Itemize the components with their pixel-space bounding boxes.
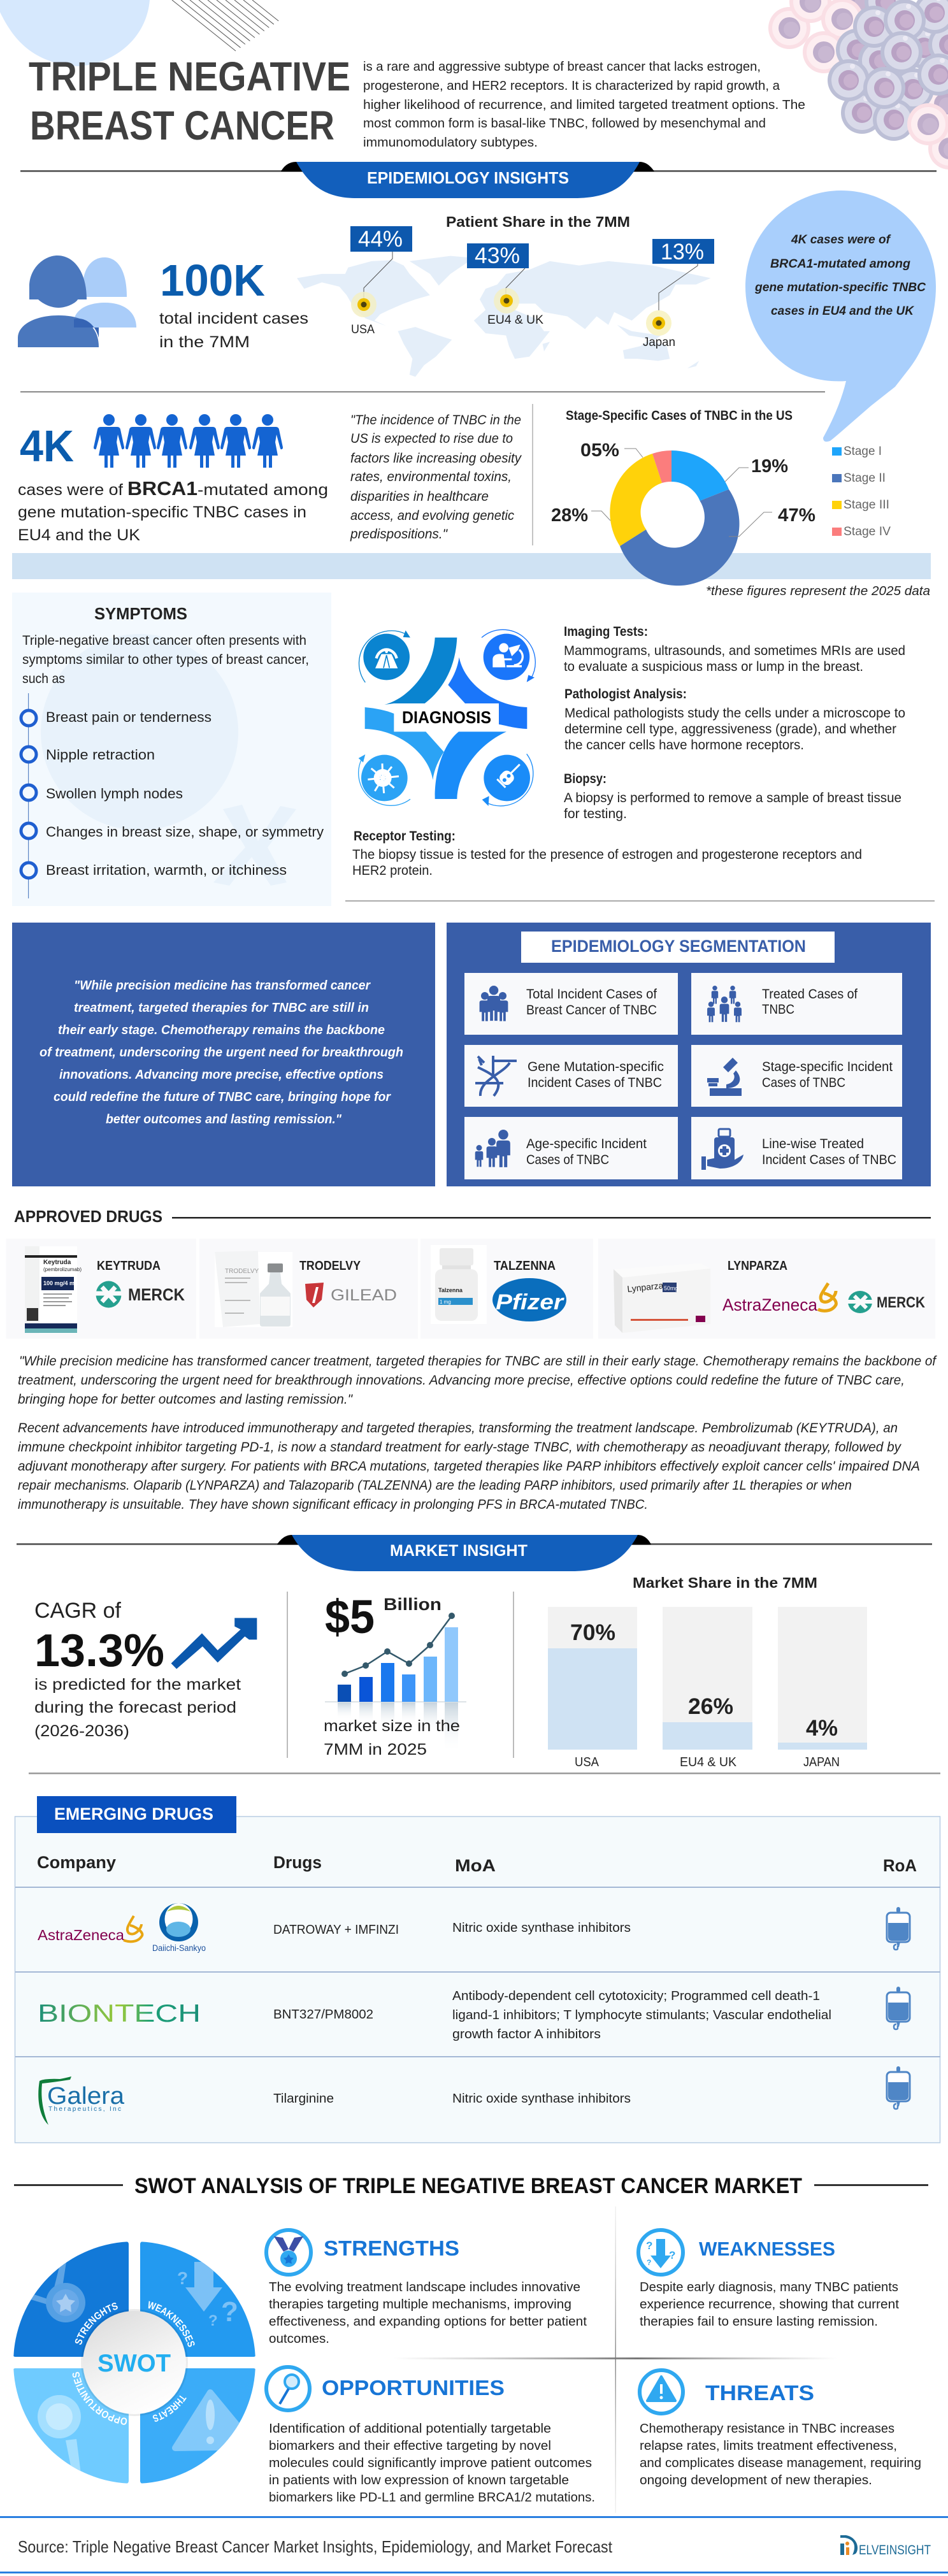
icon: rising arrow [171,1618,257,1669]
diagram: SWOT wheel: OPPORTUNITIES [73,2371,127,2425]
row: Galera: Therapeutics, Inc [48,2106,121,2113]
block: weaknesses: experience recurrence, showing that current [640,2298,899,2312]
callout bubble [745,191,936,442]
panel: epidemiology segmentation [447,923,931,1186]
callout bubble: 4K cases were of [791,233,891,247]
stat: 100K incident cases: 100K [160,255,265,305]
stat: CAGR: (2026-2036) [34,1722,129,1740]
row: AstraZeneca Daiichi-Sankyo: Nitric oxide synthase inhibitors [452,1921,631,1935]
block: threats: relapse rates, limits treatment effectiveness, [640,2439,897,2453]
chart: market share: 4% [806,1716,838,1741]
stat: 100K incident cases: total incident cases [159,310,308,327]
text: imaging tests: Mammograms, ultrasounds, and sometimes MRIs are used [564,644,905,658]
panel: symptoms: symptoms similar to other types of breast cancer, [22,652,309,667]
data note: *these figures represent the 2025 data [706,584,930,598]
card: line-wise treated: Incident Cases of TNBC [762,1153,896,1167]
stat: market size: market size in the [324,1717,460,1735]
quote text: "While precision medicine has transformed cancer treatment, targeted therapies for TNBC are still in their early stage. Chemotherapy remains the backbone of [19,1354,937,1369]
panel: quote: better outcomes and lasting remission." [106,1112,341,1126]
quote: incidence: rates, environmental toxins, [350,470,512,484]
panel: symptoms: Triple-negative breast cancer often presents with [22,633,306,648]
product box: Lynparza [627,1280,664,1294]
drug card: Trodelvy: TRODELVY [299,1259,361,1273]
card: total incident cases: Breast Cancer of TNBC [526,1003,657,1018]
quote text [18,1354,937,1407]
text: receptor testing: HER2 protein. [352,863,433,878]
logo: Merck [96,1281,185,1307]
diagram: SWOT wheel: THREATS [153,2396,187,2422]
stat: CAGR: 13.3% [34,1625,164,1676]
row: Galera: Galera [47,2083,125,2110]
text: pathologist analysis: the cancer cells have hormone receptors. [564,738,804,752]
quote: incidence: "The incidence of TNBC in the [350,413,521,428]
map marker: Japan: Japan [643,336,675,349]
text: biopsy [564,772,901,821]
card: age-specific [464,1117,678,1179]
table header: RoA [883,1856,917,1875]
row: BioNTech: BNT327/PM8002 [273,2008,373,2022]
card: total incident cases [464,973,678,1035]
treatment landscape text: Recent advancements have introduced immunotherapy and targeted therapies, transforming the treatment landscape. Pembrolizumab (KEYTRUDA), an [18,1421,898,1436]
logo: Pfizer [492,1278,566,1321]
panel: symptoms: Nipple retraction [46,747,155,763]
panel: symptoms: such as [22,672,65,686]
product [431,1245,487,1324]
text: biopsy: for testing. [564,807,627,821]
icon: syringe [496,760,524,789]
chart: stage-specific donut: 05% [580,440,619,461]
chart: stage-specific donut [551,408,891,586]
block: weaknesses: Despite early diagnosis, many TNBC patients [640,2280,898,2294]
diagram: SWOT wheel: ? [221,2296,238,2328]
intro text: is a rare and aggressive subtype of breast cancer that lacks estrogen, [363,60,761,74]
drug card: Lynparza [598,1239,935,1339]
text block: -mutated among [198,481,328,499]
panel: quote: could redefine the future of TNBC care, bringing hope for [54,1090,391,1104]
chart: stage-specific donut: Stage-Specific Cases of TNBC in the US [566,408,793,423]
card: gene mutation: Gene Mutation-specific [528,1060,664,1074]
panel: symptoms: Breast irritation, warmth, or itchiness [46,862,287,878]
legend: Stage II [844,471,886,485]
block: threats: ongoing development of new therapies. [640,2473,872,2487]
row: AstraZeneca Daiichi-Sankyo: Daiichi-Sankyo [152,1943,206,1953]
block: threats [640,2370,921,2487]
chart: market share: Market Share in the 7MM [633,1574,817,1591]
icon: six women [94,414,283,468]
text: pathologist analysis: Pathologist Analysis: [564,687,687,702]
row: BioNTech: Antibody-dependent cell cytotoxicity; Programmed cell death-1 [452,1989,820,2003]
drug card: Talzenna: TALZENNA [494,1259,556,1273]
callout bubble: gene mutation-specific TNBC [754,281,926,294]
footer: Source: Triple Negative Breast Cancer Market Insights, Epidemiology, and Market Forecast [18,2537,613,2556]
drug card: Keytruda: KEYTRUDA [97,1259,161,1273]
chart: patient share world map [297,213,714,377]
product box [25,1246,82,1334]
panel: epidemiology segmentation: EPIDEMIOLOGY SEGMENTATION [551,937,806,956]
value: USA 44%: 44% [358,227,403,252]
card: treated cases: TNBC [762,1002,794,1017]
title: BREAST CANCER [30,103,334,148]
quote text: bringing hope for better outcomes and lasting remission." [18,1392,354,1407]
text: biopsy: A biopsy is performed to remove a sample of breast tissue [564,791,901,805]
row: BioNTech: growth factor A inhibitors [452,2027,601,2041]
panel: emerging drugs table [15,1796,940,2143]
product [215,1251,292,1327]
treatment landscape text: adjuvant monotherapy after surgery. For patients with BRCA mutations, targeted therapies like PARP inhibitors effectively exploit cancer cells' impaired DNA [18,1459,920,1474]
row: AstraZeneca Daiichi-Sankyo: DATROWAY + IMFINZI [273,1923,399,1937]
stat: market size: Billion [384,1595,442,1614]
table header: Drugs [273,1853,322,1872]
map marker: Japan [643,310,675,349]
logo: Merck: MERCK [128,1285,185,1304]
panel: symptoms: Breast pain or tenderness [46,709,212,725]
block: strengths: therapies targeting multiple mechanisms, improving [269,2298,571,2312]
diagram: SWOT wheel: ? [177,2268,188,2288]
diagram: SWOT wheel: SWOT [97,2350,171,2377]
drug card: Keytruda [6,1239,196,1339]
callout bubble: BRCA1-mutated among [770,257,910,271]
illustration: cancer cells [768,0,948,169]
footer [0,2516,948,2573]
quote: incidence [350,413,522,542]
quote: incidence: US is expected to rise due to [350,431,513,446]
product: TRODELVY [225,1268,259,1275]
chart: stage-specific donut: 47% [778,505,815,526]
legend: Stage IV [844,525,891,538]
map marker: USA [351,292,377,336]
card: stage-specific [691,1045,902,1107]
card: gene mutation [464,1045,678,1107]
title [29,54,350,148]
card: stage-specific: Cases of TNBC [762,1076,845,1090]
decorative dividers [615,2206,616,2513]
light band [12,553,931,579]
text: imaging tests: to evaluate a suspicious mass or lump in the breast. [564,659,863,674]
text: receptor testing [352,829,862,878]
logo: AstraZeneca: AstraZeneca [722,1295,818,1314]
chart: market share: USA [575,1755,600,1769]
stat: 4K BRCA1: 4K [20,421,74,471]
card: age-specific: Age-specific Incident [526,1137,647,1151]
drug card: Lynparza: LYNPARZA [728,1259,787,1273]
panel: symptoms: Changes in breast size, shape, or symmetry [46,824,324,840]
logo: DelveInsight [840,2535,931,2558]
stat: market size: $5 [325,1590,375,1643]
stat: market size: 7MM in 2025 [324,1741,427,1759]
diagram: diagnosis [359,630,535,806]
intro text: progesterone, and HER2 receptors. It is characterized by rapid growth, a [363,79,780,93]
value: EU4 & UK 43%: 43% [475,243,520,268]
block: opportunities: OPPORTUNITIES [322,2376,505,2400]
treatment landscape text: immunotherapy is unsuitable. They have shown significant efficacy in prolonging PFS in BRCA-mutated TNBC. [18,1497,648,1512]
drug card: Talzenna [420,1239,593,1339]
icon: MRI [375,649,398,668]
block: threats: and complicates disease management, requiring [640,2456,921,2470]
logo: Pfizer: Pfizer [496,1290,564,1314]
product box [614,1263,710,1333]
section banner: epidemiology insights [20,162,937,198]
title: TRIPLE NEGATIVE [29,54,350,99]
block: strengths: effectiveness, and expanding options for better patient [269,2315,587,2329]
panel: quote: their early stage. Chemotherapy remains the backbone [58,1023,385,1037]
diagram: SWOT wheel: ? [208,2312,218,2329]
product: Talzenna [438,1287,463,1293]
panel: emerging drugs table: EMERGING DRUGS [54,1804,213,1824]
panel: quote: treatment, targeted therapies for TNBC are still in [74,1001,369,1015]
logo: AstraZeneca [722,1283,836,1314]
chart: market share: EU4 & UK [680,1755,737,1769]
row: BioNTech [38,1987,910,2041]
chart: stage-specific donut: 28% [551,505,588,526]
card: treated cases [691,973,902,1035]
text block: cases were of [18,481,123,499]
quote: incidence: factors like increasing obesity [350,451,522,466]
diagram: SWOT wheel: STRENGHTS [75,2303,118,2345]
row: BioNTech: ligand-1 inhibitors; T lymphocyte stimulants; Vascular endothelial [452,2008,831,2022]
chart: market share: 70% [570,1620,615,1645]
decorative blob top left [0,0,150,66]
chart: market share: JAPAN [803,1755,840,1769]
logo: Merck: MERCK [877,1294,926,1311]
text: imaging tests [564,624,905,674]
card: gene mutation: Incident Cases of TNBC [528,1076,662,1090]
row: AstraZeneca Daiichi-Sankyo [38,1903,910,1953]
text block: BRCA1 [127,477,198,500]
drug card: Trodelvy [199,1239,418,1339]
logo: Merck [848,1291,926,1313]
block: opportunities: biomarkers like PD-L1 and germline BRCA1/2 mutations. [269,2491,595,2505]
block: strengths [266,2230,587,2346]
row: BioNTech: BIONTECH [38,2000,201,2027]
quote: incidence: disparities in healthcare [350,489,489,504]
intro text [363,60,805,150]
icon: pathologist [492,643,522,667]
stat: market size [324,1590,466,1759]
map marker: EU4 & UK: EU4 & UK [487,313,543,327]
block: opportunities: in patients with low expression of known targetable [269,2473,569,2487]
icon: people [18,255,136,347]
callout bubble: cases in EU4 and the UK [771,305,914,318]
product box: (pembrolizumab) [43,1267,82,1272]
block: weaknesses: WEAKNESSES [699,2238,835,2260]
product box: Keytruda [43,1259,71,1266]
treatment landscape text: immune checkpoint inhibitor targeting PD-1, is now a standard treatment for early-stage TNBC, with chemotherapy as neoadjuvant therapy, followed by [18,1440,901,1455]
text: pathologist analysis [564,687,905,752]
intro text: higher likelihood of recurrence, and limited targeted treatment options. The [363,98,805,112]
icon: cancer cell [368,763,399,793]
quote: incidence: access, and evolving genetic [350,508,514,523]
product box: 50mg [664,1285,679,1292]
block: weaknesses: ? [669,2249,675,2261]
value: Japan 13%: 13% [661,240,704,264]
table header: MoA [455,1856,496,1875]
stat: CAGR: during the forecast period [34,1699,236,1716]
treatment landscape text: repair mechanisms. Olaparib (LYNPARZA) and Talazoparib (TALZENNA) are the leading PARP inhibitors, used primarily after 1L therapies or when [18,1478,852,1493]
block: opportunities: molecules could significantly improve patient outcomes [269,2456,592,2470]
card: line-wise treated [691,1117,902,1179]
section banner: epidemiology insights: EPIDEMIOLOGY INSIGHTS [367,168,569,187]
text: pathologist analysis: determine cell type, aggressiveness (grade), and whether [564,722,896,737]
chart: stage-specific donut: 19% [751,456,788,477]
text: imaging tests: Imaging Tests: [564,624,648,639]
legend: Stage III [844,498,889,512]
stat: 100K incident cases [159,255,308,351]
legend: Stage I [844,445,882,458]
treatment landscape text [18,1421,920,1512]
heading: approved drugs: APPROVED DRUGS [14,1207,162,1226]
logo: Gilead [305,1283,397,1307]
card: line-wise treated: Line-wise Treated [762,1137,864,1151]
panel: quote: innovations. Advancing more precise, effective options [59,1068,384,1082]
table header [37,1853,917,1875]
panel: symptoms: Swollen lymph nodes [46,786,183,802]
stat: CAGR: CAGR of [34,1599,122,1623]
heading: SWOT analysis: SWOT ANALYSIS OF TRIPLE NEGATIVE BREAST CANCER MARKET [134,2174,802,2198]
decorative hatching [172,0,278,51]
section banner: market insight: MARKET INSIGHT [390,1542,528,1560]
text block: EU4 and the UK [18,526,140,544]
panel: symptoms: SYMPTOMS [94,604,187,623]
diagram: SWOT wheel: WEAKNESSES [148,2301,195,2347]
text: biopsy: Biopsy: [564,772,607,786]
panel: quote: of treatment, underscoring the urgent need for breakthrough [40,1046,403,1060]
card: age-specific: Cases of TNBC [526,1153,609,1167]
map marker: EU4 & UK [487,288,543,327]
block: weaknesses: therapies fail to ensure lasting remission. [640,2315,878,2329]
panel: quote: "While precision medicine has transformed cancer [74,979,371,993]
chart: growth bars [325,1613,466,1753]
text block [18,477,328,544]
row: Galera [38,2066,910,2125]
block: opportunities: biomarkers and their effective targeting by novel [269,2439,551,2453]
logo: DelveInsight: ELVEINSIGHT [859,2543,931,2558]
block: opportunities: Identification of additional potentially targetable [269,2422,551,2436]
row: Galera: Nitric oxide synthase inhibitors [452,2092,631,2106]
map marker: USA: USA [351,323,375,336]
card: treated cases: Treated Cases of [762,987,858,1002]
text block: gene mutation-specific TNBC cases in [18,503,306,521]
legend [832,445,891,538]
section banner: market insight [17,1535,932,1571]
block: weaknesses [638,2230,899,2329]
panel: symptoms [12,593,331,906]
card: total incident cases: Total Incident Cases of [526,987,657,1002]
intro text: immunomodulatory subtypes. [363,136,538,150]
table header: Company [37,1853,116,1872]
diagram: diagnosis: DIAGNOSIS [402,708,491,727]
row: Galera: Tilarginine [273,2092,334,2106]
block: weaknesses: ? [646,2240,652,2252]
text: pathologist analysis: Medical pathologists study the cells under a microscope to [564,706,905,721]
diagram: SWOT wheel [13,2241,255,2484]
stat: 100K incident cases: in the 7MM [159,333,250,351]
timeline [28,693,29,898]
chart: market share [548,1574,867,1769]
row: AstraZeneca Daiichi-Sankyo: AstraZeneca [38,1927,124,1943]
quote: incidence: predispositions." [350,527,449,542]
block: opportunities [266,2367,595,2505]
block: threats: THREATS [705,2381,814,2405]
product: 1 mg [440,1299,451,1305]
panel: quote [12,923,435,1186]
stat: 4K BRCA1 [18,414,328,544]
chart title: Patient Share in the 7MM [446,213,630,230]
block: weaknesses: ? [647,2258,651,2267]
block: strengths: The evolving treatment landscape includes innovative [269,2280,580,2294]
text: receptor testing: The biopsy tissue is tested for the presence of estrogen and progesterone receptors and [352,847,862,862]
watermark icons [29,2262,85,2322]
block: strengths: outcomes. [269,2332,329,2346]
stat: CAGR: is predicted for the market [34,1676,241,1694]
product box: 100 mg/4 mL [43,1280,78,1286]
stat: CAGR [34,1599,257,1740]
intro text: most common form is basal-like TNBC, followed by mesenchymal and [363,117,766,131]
chart: market share: 26% [688,1694,733,1719]
card: stage-specific: Stage-specific Incident [762,1060,893,1074]
block: strengths: STRENGTHS [324,2236,459,2260]
text: receptor testing: Receptor Testing: [354,829,456,844]
block: threats: Chemotherapy resistance in TNBC increases [640,2422,894,2436]
quote text: treatment, underscoring the urgent need for breakthrough innovations. Advancing more precise, effective options could redefine the future of TNBC care, [18,1373,905,1388]
logo: Gilead: GILEAD [331,1286,397,1304]
